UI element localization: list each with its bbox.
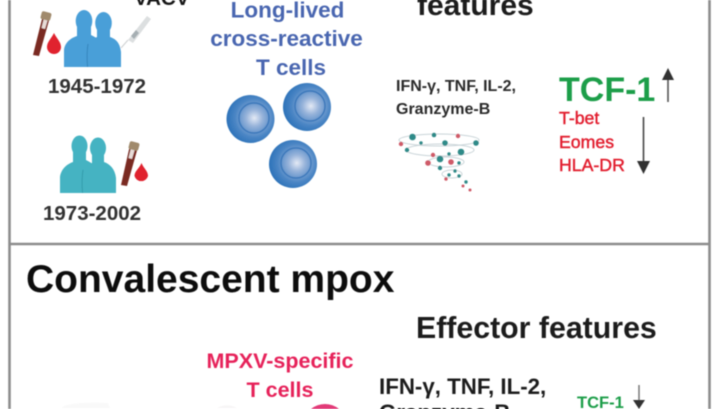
- text: red markers: T-bet: [559, 108, 599, 128]
- icon: blue T cell bottom: [269, 140, 317, 188]
- arrow: down: [637, 117, 650, 174]
- label: MPXV-specific T cells: MPXV-specific: [207, 349, 354, 373]
- label: MPXV-specific T cells: [207, 349, 354, 402]
- icon: faint cell top: [217, 405, 237, 408]
- arrow: up: [662, 68, 674, 102]
- icon: faint people top: [62, 403, 110, 408]
- icon: blood tube 1945-1972: [33, 11, 52, 56]
- icon: people 1945-1972: [64, 10, 121, 67]
- heading: long-lived cross-reactive T cells: cross-reactive: [210, 26, 363, 51]
- text: red markers: HLA-DR: [559, 155, 625, 175]
- label: TCF-1 top: TCF-1: [559, 71, 655, 109]
- icon: cytokine tornado: [399, 133, 479, 192]
- text: cytokines bottom: IFN-γ, TNF, IL-2,: [379, 374, 546, 399]
- icon: blue T cell right: [283, 83, 331, 131]
- heading: convalescent mpox: Convalescent mpox: [26, 258, 395, 301]
- heading: long-lived cross-reactive T cells: T cells: [256, 55, 326, 80]
- icon: syringe: [121, 16, 151, 48]
- icon: blood drop 1945-1972: [47, 33, 61, 54]
- heading: effector features: Effector features: [416, 312, 657, 345]
- icon: blue T cell left: [226, 95, 274, 143]
- text: red markers: Eomes: [559, 132, 614, 152]
- label: MPXV-specific T cells: T cells: [247, 378, 313, 402]
- arrow: down bottom: [633, 385, 645, 409]
- text: cytokines top: [396, 78, 516, 118]
- icon: blood drop 1973-2002: [134, 163, 148, 181]
- heading: long-lived cross-reactive T cells: [210, 0, 363, 80]
- label: 1945-1972: 1945-1972: [48, 75, 146, 98]
- icon: blood tube 1973-2002: [121, 141, 140, 186]
- icon: pink T cell: [311, 404, 339, 409]
- text: cytokines top: IFN-γ, TNF, IL-2,: [396, 78, 516, 95]
- text: cytokines top: Granzyme-B: [396, 101, 490, 118]
- icon: people 1973-2002: [60, 136, 116, 193]
- text: red markers: [559, 108, 625, 175]
- label: 1973-2002: 1973-2002: [43, 202, 141, 225]
